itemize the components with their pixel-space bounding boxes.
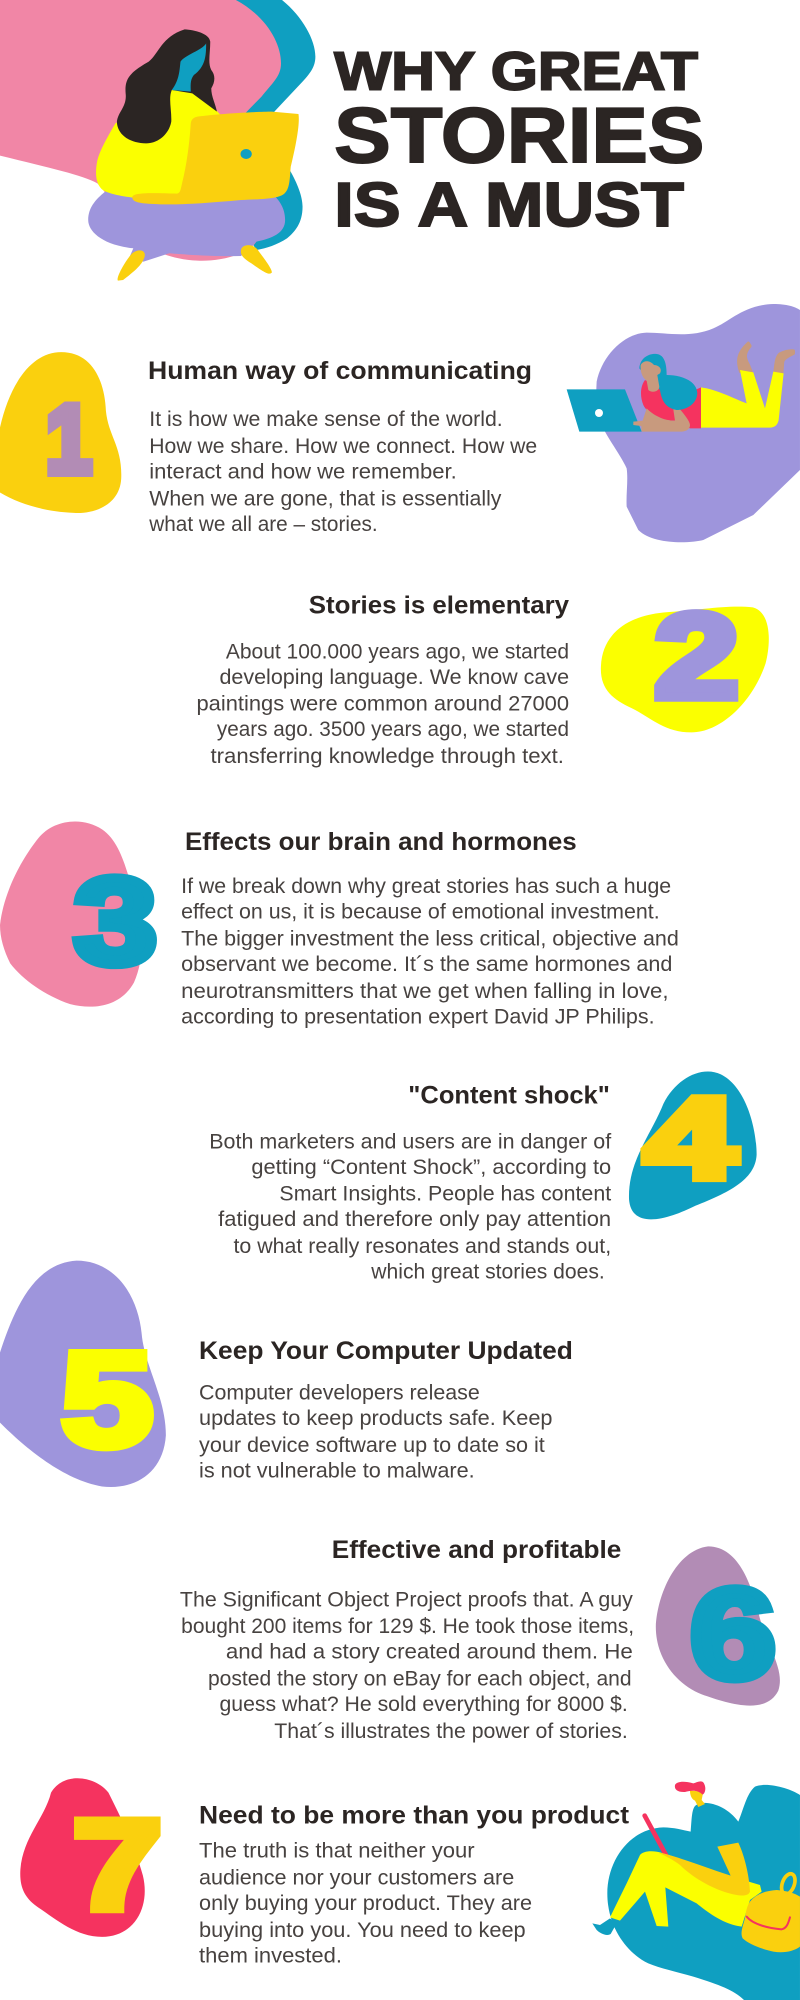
heading 1: Human way of communicating (148, 357, 532, 385)
body 3: The bigger investment the less critical, objective and (181, 927, 679, 950)
yellow trousers (610, 1851, 762, 1927)
body 2: years ago. 3500 years ago, we started (217, 718, 569, 741)
number 5: 5 (61, 1326, 153, 1475)
body 3: neurotransmitters that we get when falling in love, (181, 980, 669, 1003)
body 4: to what really resonates and stands out, (233, 1235, 611, 1258)
number 2: 2 (655, 589, 739, 723)
arm (633, 408, 690, 432)
front foot (775, 351, 793, 373)
body 3: according to presentation expert David JP Philips. (181, 1005, 655, 1028)
body 4: Smart Insights. People has content (279, 1183, 611, 1206)
body 6: and had a story created around them. He (226, 1641, 633, 1664)
illustration: woman lying with laptop (567, 304, 800, 542)
number 3: 3 (74, 852, 157, 989)
section 2 (196, 589, 769, 768)
body 2: developing language. We know cave (219, 666, 569, 689)
heading 3: Effects our brain and hormones (185, 828, 577, 856)
body 3: effect on us, it is because of emotional investment. (181, 901, 660, 924)
section 1 (0, 352, 537, 536)
body 1 (148, 408, 537, 536)
backpack handle (779, 1872, 798, 1896)
backpack (742, 1890, 800, 1952)
body 7 (199, 1840, 532, 1967)
trousers (701, 370, 784, 428)
hair (639, 354, 697, 410)
body 6: That´s illustrates the power of stories. (274, 1720, 628, 1743)
laptop logo (241, 149, 252, 159)
body 7: only buying your product. They are (199, 1892, 532, 1915)
title line 2: STORIES (334, 93, 704, 179)
teal blob (607, 1785, 800, 2000)
backpack strap (747, 1917, 790, 1929)
body 4: fatigued and therefore only pay attention (218, 1208, 611, 1231)
body 5: updates to keep products safe. Keep (199, 1407, 552, 1430)
number blob 3 (0, 821, 142, 1007)
pencil (645, 1816, 666, 1855)
laptop dot (595, 409, 603, 417)
body 5: is not vulnerable to malware. (199, 1460, 475, 1483)
body 3 (181, 875, 679, 1028)
heading 4: "Content shock" (408, 1082, 610, 1110)
body 1: It is how we make sense of the world. (149, 408, 503, 431)
body 6: posted the story on eBay for each object, and (208, 1667, 632, 1690)
hair (117, 29, 217, 143)
body 4: getting “Content Shock”, according to (251, 1156, 611, 1179)
body 2 (196, 640, 569, 768)
number blob 2 (601, 607, 769, 732)
pink blob (0, 0, 281, 261)
number blob 7 (20, 1778, 145, 1937)
body 6: guess what? He sold everything for 8000 $. (219, 1693, 628, 1716)
purple blob (596, 304, 800, 542)
body 7: The truth is that neither your (199, 1840, 475, 1863)
heading 7: Need to be more than you product (199, 1801, 629, 1829)
body 4: which great stories does. (370, 1260, 605, 1283)
section 4 (209, 1071, 757, 1283)
left foot (118, 250, 145, 281)
red top (641, 380, 701, 428)
teal blob (205, 0, 315, 250)
hair (675, 1781, 705, 1795)
body 2: transferring knowledge through text. (211, 745, 564, 768)
body 1: what we all are – stories. (148, 513, 378, 536)
title (334, 41, 704, 240)
body 1: interact and how we remember. (149, 460, 457, 483)
number 4: 4 (644, 1075, 736, 1203)
number blob 5 (0, 1261, 166, 1487)
body 6: The Significant Object Project proofs that. A guy (180, 1588, 633, 1611)
purple cushion (88, 192, 285, 262)
number blob 6 (656, 1546, 780, 1706)
laptop (132, 112, 299, 204)
illustration: man reclining with backpack (592, 1781, 800, 2000)
heading 6: Effective and profitable (332, 1536, 621, 1564)
body 3: observant we become. It´s the same hormones and (181, 953, 672, 976)
body 2: paintings were common around 27000 (196, 693, 569, 716)
body 5: Computer developers release (199, 1382, 480, 1405)
face and neck (641, 361, 661, 392)
title line 1: WHY GREAT (334, 41, 698, 101)
laptop (567, 389, 642, 432)
face (172, 43, 206, 92)
body 3: If we break down why great stories has such a huge (181, 875, 671, 898)
body 1: When we are gone, that is essentially (149, 487, 502, 510)
title line 3: IS A MUST (334, 170, 684, 240)
section 7 (20, 1778, 629, 1967)
heading 5: Keep Your Computer Updated (199, 1337, 573, 1365)
back foot (739, 343, 752, 373)
number 1: 1 (46, 385, 92, 494)
body 5: your device software up to date so it (199, 1434, 545, 1457)
number 7: 7 (73, 1794, 162, 1937)
body 7: them invested. (199, 1944, 342, 1967)
section 6 (180, 1536, 780, 1743)
number 6: 6 (690, 1563, 776, 1706)
body 2: About 100.000 years ago, we started (226, 640, 569, 663)
body 7: buying into you. You need to keep (199, 1919, 526, 1942)
header illustration: woman with laptop (0, 0, 315, 281)
body 6: bought 200 items for 129 $. He took those items, (181, 1615, 634, 1638)
head (690, 1791, 705, 1807)
body 1: How we share. How we connect. How we (149, 435, 537, 458)
section 5 (0, 1261, 573, 1487)
body 4 (209, 1130, 611, 1283)
raised leg (658, 1843, 750, 1896)
yellow body (96, 90, 221, 198)
number blob 1 (0, 352, 121, 513)
body 7: audience nor your customers are (199, 1867, 514, 1890)
heading 2: Stories is elementary (309, 592, 569, 620)
body 4: Both marketers and users are in danger of (209, 1130, 611, 1153)
foot (592, 1918, 617, 1935)
number blob 4 (629, 1071, 757, 1219)
right foot (241, 245, 272, 274)
body 5 (199, 1382, 552, 1483)
body 6 (180, 1588, 634, 1743)
section 3 (0, 821, 679, 1028)
